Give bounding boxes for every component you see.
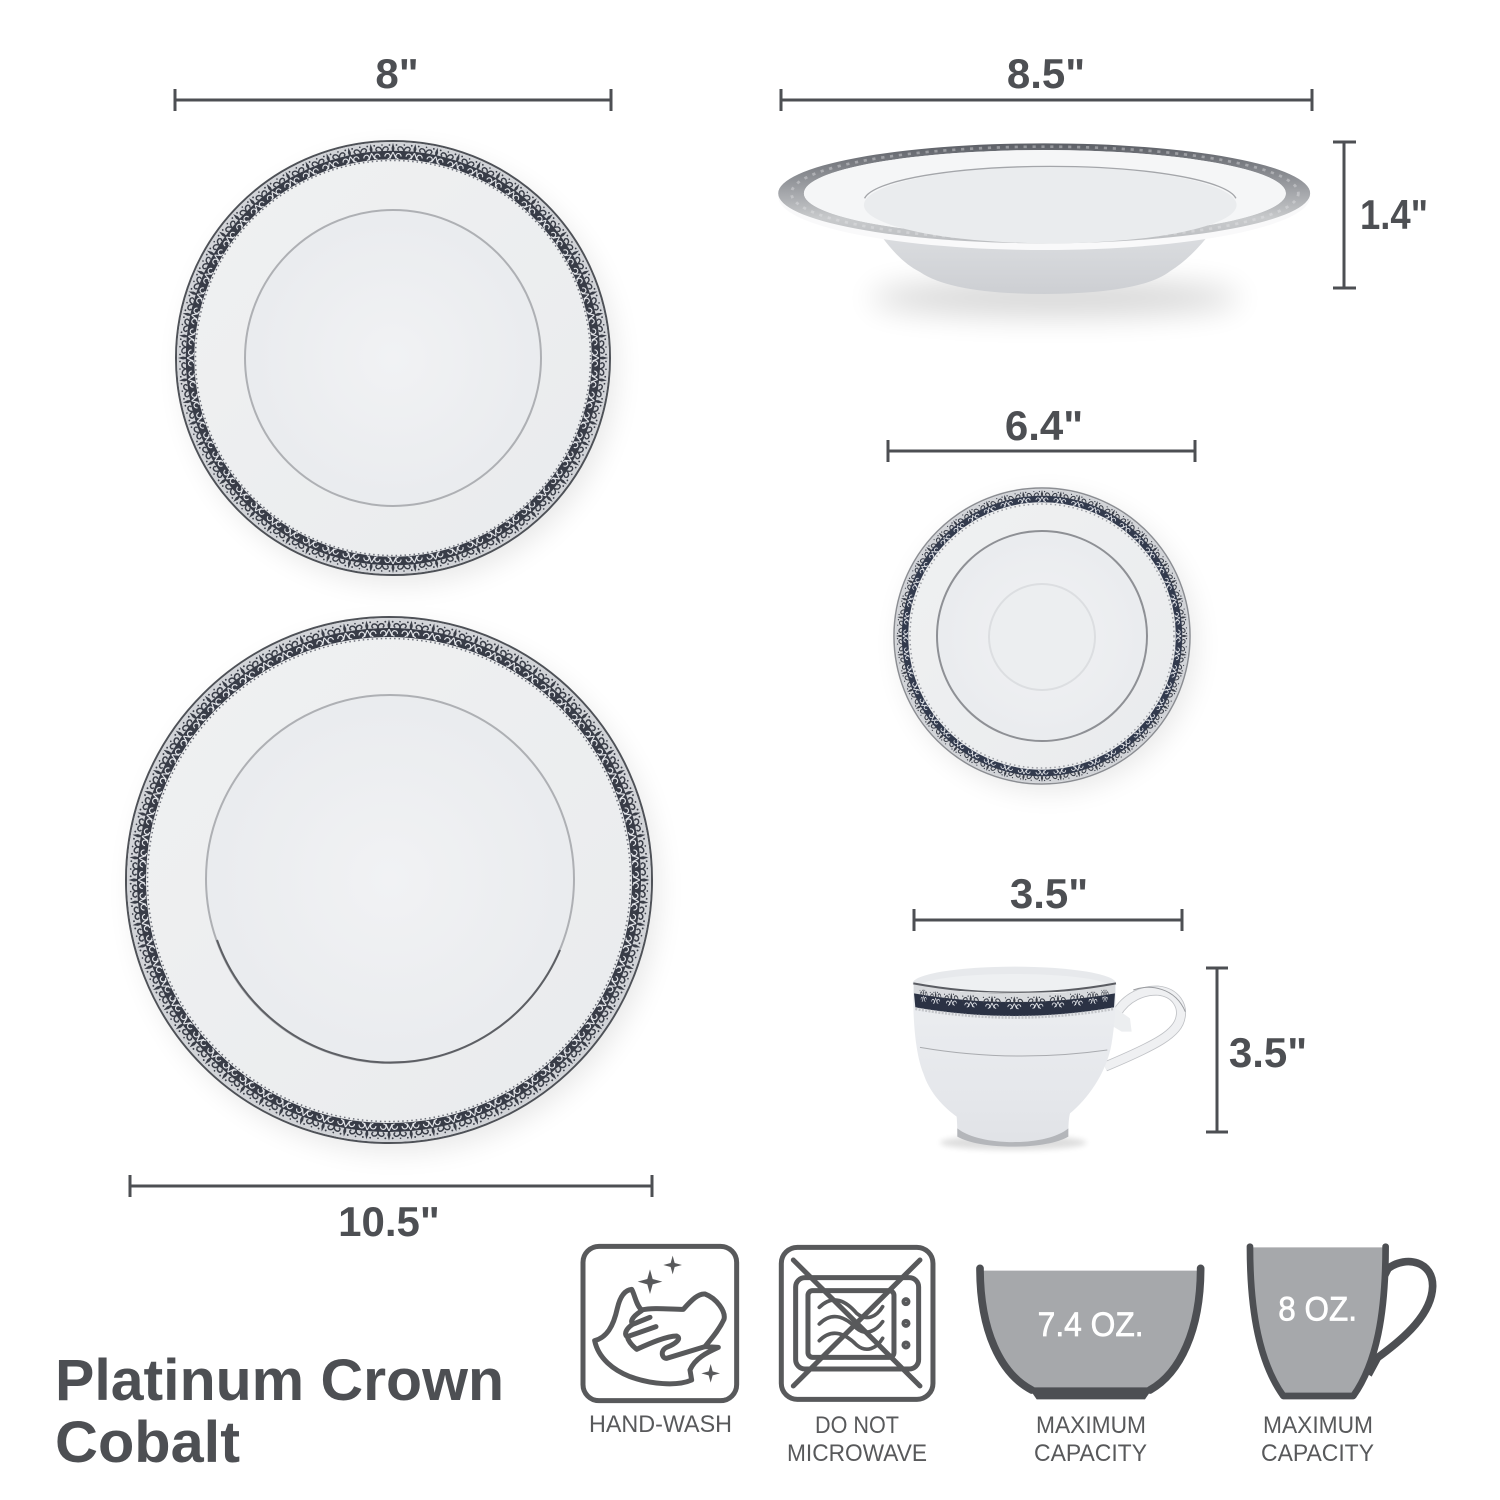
plate: 8 inch salad plate [117, 94, 669, 622]
dimension: 1.4 inch bowl height: 1.4" [1360, 191, 1428, 238]
mug capacity label: CAPACITY [1261, 1440, 1374, 1467]
icon: do not microwave [781, 1247, 933, 1399]
bowl capacity label [1034, 1412, 1147, 1467]
teacup [913, 967, 1185, 1150]
dimension: 8 inch plate width [175, 50, 611, 111]
do not microwave label [787, 1412, 927, 1467]
dimension: 6.4 inch saucer width: 6.4" [1005, 402, 1083, 449]
mug capacity label [1261, 1412, 1374, 1467]
do not microwave label: DO NOT [815, 1412, 899, 1439]
icon: mug capacity: 8 OZ. [1278, 1291, 1357, 1329]
title: Cobalt [55, 1410, 240, 1475]
dimension: 1.4 inch bowl height [1333, 142, 1428, 288]
dimension: 3.5 inch cup width [914, 870, 1182, 931]
icon: hand-wash [583, 1246, 737, 1401]
dimension: 8.5 inch bowl width [781, 50, 1312, 111]
dimension: 3.5 inch cup width: 3.5" [1010, 870, 1088, 917]
dimension: 3.5 inch cup height [1206, 968, 1307, 1132]
title [55, 1348, 504, 1475]
dimension: 3.5 inch cup height: 3.5" [1229, 1029, 1307, 1076]
plate: 10.5 inch dinner plate [53, 559, 725, 1201]
dimension: 8.5 inch bowl width: 8.5" [1007, 50, 1085, 97]
bowl capacity label: CAPACITY [1034, 1440, 1147, 1467]
mug capacity label: MAXIMUM [1263, 1412, 1373, 1439]
dimension: 6.4 inch saucer width [888, 402, 1195, 462]
icon: bowl capacity: 7.4 OZ. [1038, 1306, 1144, 1344]
dimension: 10.5 inch plate width: 10.5" [338, 1198, 440, 1245]
title: Platinum Crown [55, 1348, 504, 1413]
saucer [855, 458, 1229, 814]
dimension: 10.5 inch plate width [130, 1175, 652, 1245]
bowl capacity label: MAXIMUM [1036, 1412, 1146, 1439]
icon: mug capacity [1250, 1247, 1433, 1396]
soup bowl [778, 143, 1310, 316]
do not microwave label: MICROWAVE [787, 1440, 927, 1467]
hand-wash label: HAND-WASH [589, 1411, 732, 1438]
dimension: 8 inch plate width: 8" [375, 50, 419, 97]
icon: bowl capacity [980, 1268, 1201, 1399]
